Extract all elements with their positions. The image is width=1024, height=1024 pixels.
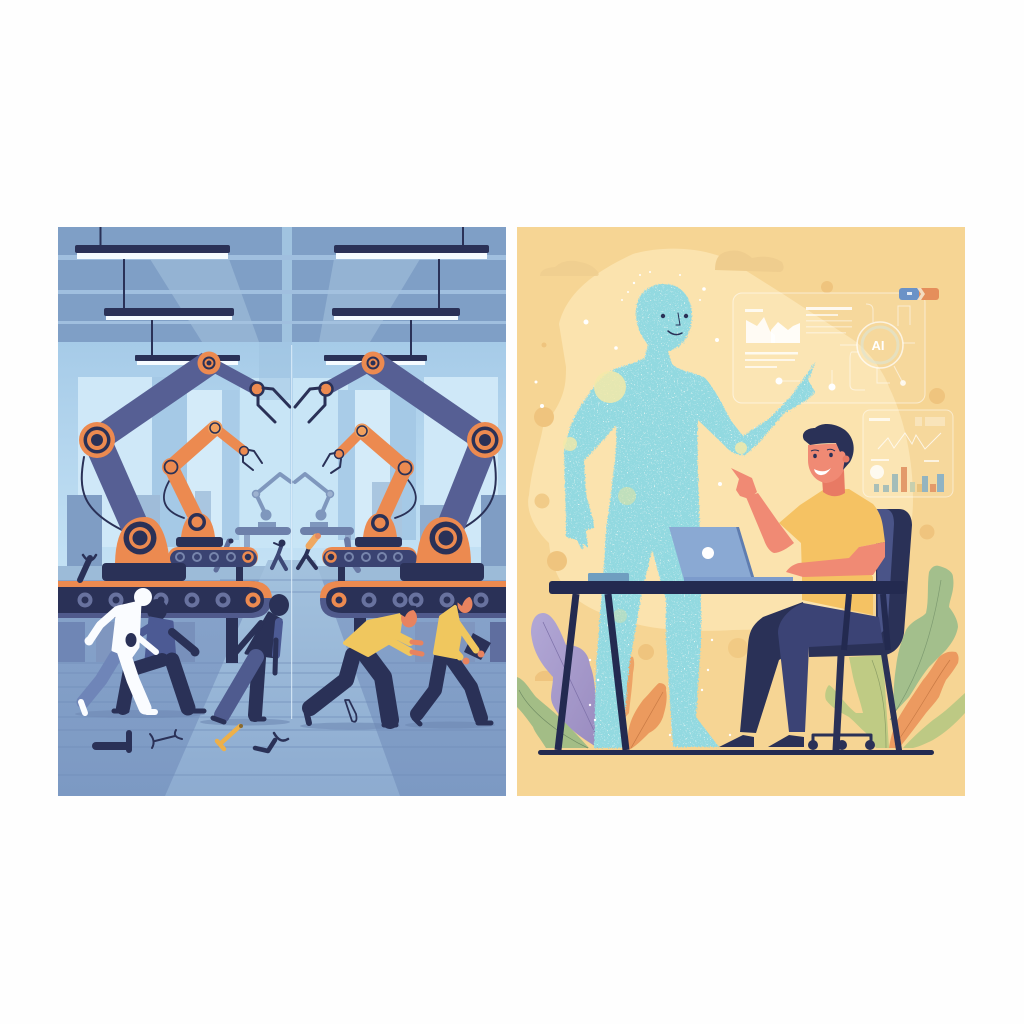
laptop xyxy=(669,527,793,582)
AI particle figure xyxy=(564,284,816,748)
factory back wall xyxy=(58,342,506,572)
yellow worker leaning xyxy=(306,606,422,725)
translucent dashboard panel xyxy=(733,293,925,403)
hair xyxy=(803,424,854,470)
floor shadows under workers xyxy=(75,710,495,730)
plant: left green leaf xyxy=(517,677,589,748)
small chart panel xyxy=(863,410,953,497)
plant: right green leaves xyxy=(825,566,965,748)
yellow worker with tablet xyxy=(414,593,491,724)
plant: right orange leaf xyxy=(889,652,959,748)
circuit connectors xyxy=(776,304,915,390)
plant: orange leaf left xyxy=(622,657,667,750)
tablet on desk xyxy=(588,573,629,582)
AI label: AI xyxy=(872,338,884,353)
far leg xyxy=(740,602,809,733)
fallen harness on floor xyxy=(345,700,356,722)
shoes xyxy=(719,735,804,747)
warm background xyxy=(517,227,965,796)
distant conveyors xyxy=(235,527,354,547)
orange robot arm right xyxy=(323,424,416,523)
small conveyor right xyxy=(322,513,417,581)
white humanoid robot xyxy=(81,588,156,713)
seated man xyxy=(719,424,885,747)
panel: robotic factory xyxy=(58,227,506,796)
desk xyxy=(549,581,906,750)
orange robot arm left xyxy=(162,421,262,520)
large conveyor left xyxy=(58,517,272,663)
panel: human collaborating with AI xyxy=(517,227,965,796)
facial features xyxy=(811,449,850,475)
shirt xyxy=(779,489,885,615)
clouds xyxy=(594,256,784,276)
face xyxy=(808,443,846,483)
status chips xyxy=(899,288,939,300)
small conveyor left xyxy=(168,513,258,581)
plant: purple leaf xyxy=(531,613,598,748)
distant robot arms xyxy=(252,474,334,527)
large conveyor right xyxy=(320,517,506,632)
scattered tools xyxy=(96,724,288,751)
drifting particles xyxy=(534,271,731,736)
claw tool on wall xyxy=(80,555,96,580)
wall panels under conveyors xyxy=(58,622,506,662)
dark worker behind white figure xyxy=(114,599,204,711)
lower arm xyxy=(786,542,885,577)
large robot arm right xyxy=(295,352,503,538)
neck xyxy=(822,470,845,496)
factory floor xyxy=(58,560,506,796)
distant workers xyxy=(216,533,358,570)
AI figure face xyxy=(661,313,688,335)
dark leaning worker xyxy=(213,594,289,722)
pointing hand xyxy=(731,468,757,499)
near leg xyxy=(778,603,883,732)
ceiling xyxy=(58,227,506,400)
center seam xyxy=(291,345,292,719)
raised arm xyxy=(746,493,794,553)
wall windows and columns xyxy=(67,377,506,570)
AI figure glowing joints xyxy=(563,371,747,623)
large robot arm left xyxy=(79,352,290,538)
floor line xyxy=(538,750,934,755)
chair xyxy=(808,509,912,750)
ceiling lamps xyxy=(75,227,489,365)
background dots xyxy=(534,281,945,681)
AI circuit diagram xyxy=(857,322,903,368)
pale glow blob xyxy=(528,249,913,631)
